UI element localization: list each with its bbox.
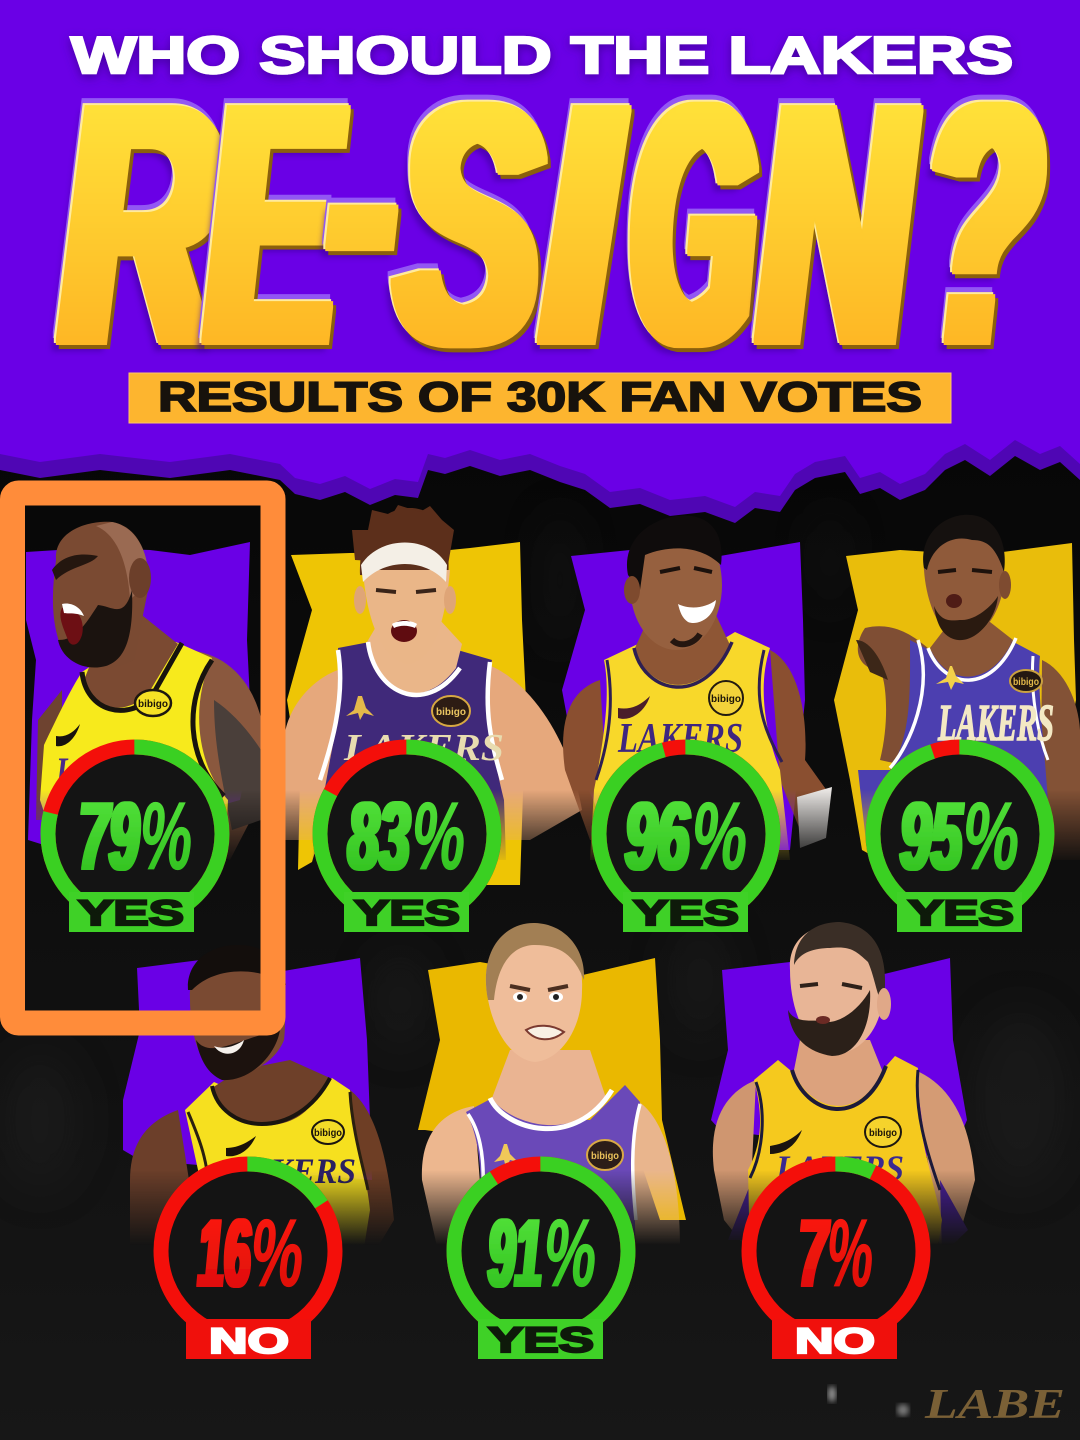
- gauge 95 percent yes: 95: [900, 783, 963, 890]
- player card: yellow torn paper 6: [418, 958, 686, 1220]
- orange highlight frame: [12, 493, 273, 1023]
- player 6 in lavender jersey grimacing: [422, 923, 680, 1260]
- gauge 7 percent no: %: [827, 1200, 873, 1307]
- title: re-sign: I: [542, 35, 622, 415]
- background: blurred crowd texture: [0, 510, 1070, 1190]
- player 1 in yellow jersey: [36, 522, 261, 860]
- watermark: LABE: [924, 1382, 1065, 1428]
- player card: yellow torn paper 4: [834, 543, 1076, 860]
- player 7 in gold jersey with beard: bibigo: [869, 1128, 897, 1139]
- player 1 in yellow jersey: LAKERS: [55, 749, 166, 794]
- player 5 in yellow jersey smiling: bibigo: [314, 1128, 342, 1139]
- subtitle banner: RESULTS OF 30K FAN VOTES: [158, 373, 922, 420]
- player card: yellow torn paper 2: [287, 542, 526, 885]
- gauge 83 percent yes: 83: [348, 783, 410, 890]
- player card: purple torn paper 1: [26, 542, 252, 850]
- subtitle banner: [129, 373, 951, 423]
- gauge 96 percent yes: 96: [625, 783, 689, 890]
- gauge 83 percent yes: YES: [354, 894, 460, 933]
- player card: purple torn paper 7: [711, 958, 967, 1160]
- gauge 79 percent yes: %: [140, 783, 192, 890]
- title: re-sign: E: [208, 35, 343, 415]
- title: who should the lakers: WHO SHOULD THE LAKERS: [71, 27, 1013, 85]
- player 5 in yellow jersey smiling: KERS: [269, 1151, 356, 1191]
- gauge 83 percent yes: [320, 747, 494, 933]
- player 7 in gold jersey with beard: LAKERS: [775, 1148, 904, 1188]
- player 3 in yellow jersey smiling: [563, 516, 832, 860]
- gauge 79 percent yes: YES: [78, 894, 184, 933]
- title: re-sign: G: [632, 35, 754, 415]
- player card: purple torn paper 5: [123, 958, 372, 1180]
- player 4 in blue jersey pointing: bibigo: [1013, 677, 1039, 688]
- gauge 83 percent yes: %: [412, 783, 465, 890]
- player card: purple torn paper 3: [562, 542, 805, 850]
- player 3 in yellow jersey smiling: bibigo: [711, 694, 741, 705]
- gauge 96 percent yes: YES: [633, 894, 739, 933]
- gauge 79 percent yes: [48, 747, 222, 933]
- gauge 96 percent yes: %: [692, 783, 747, 890]
- gauge 95 percent yes: YES: [908, 894, 1014, 933]
- title: re-sign: N: [760, 35, 916, 415]
- player 2 in purple jersey with headband: bibigo: [436, 707, 466, 718]
- player 5 in yellow jersey smiling: [130, 960, 394, 1242]
- gauge 91 percent yes: 91: [488, 1200, 542, 1307]
- title: re-sign: [62, 9, 1041, 415]
- watermark: [828, 1382, 1065, 1428]
- title: re-sign: -: [330, 9, 394, 389]
- gauge 16 percent no: NO: [209, 1322, 289, 1361]
- gauge 16 percent no: 16: [198, 1200, 250, 1307]
- gauge 79 percent yes: 79: [79, 783, 139, 890]
- player 4 in blue jersey pointing: [856, 515, 1080, 860]
- gauge 16 percent no: [161, 1164, 335, 1361]
- player 6 in lavender jersey grimacing: bibigo: [591, 1151, 619, 1162]
- gauge 95 percent yes: [873, 747, 1047, 933]
- gauge 95 percent yes: %: [963, 783, 1019, 890]
- player 2 in purple jersey with headband: LAKERS: [343, 727, 504, 769]
- title: re-sign: R: [62, 35, 218, 415]
- player 2 in purple jersey with headband: [284, 505, 582, 860]
- background: purple header with torn edge: [0, 0, 1080, 523]
- gauge 91 percent yes: %: [544, 1200, 596, 1307]
- background: dark lower area: [0, 400, 1080, 1440]
- player 3 in yellow jersey smiling: LAKERS: [617, 716, 743, 762]
- gauge 96 percent yes: [599, 747, 773, 933]
- title: re-sign: S: [398, 35, 541, 415]
- player 7 in gold jersey with beard: [713, 922, 975, 1260]
- gauge 91 percent yes: [454, 1164, 628, 1360]
- player 1 in yellow jersey: bibigo: [138, 699, 168, 710]
- gauge 7 percent no: NO: [795, 1322, 875, 1361]
- gauge 7 percent no: [749, 1164, 923, 1361]
- gauge 16 percent no: %: [251, 1200, 303, 1307]
- gauge 91 percent yes: YES: [488, 1321, 594, 1360]
- gauge 7 percent no: 7: [799, 1200, 829, 1307]
